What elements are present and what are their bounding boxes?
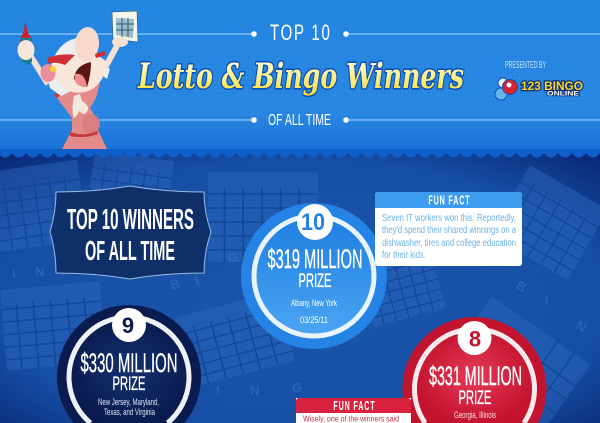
winner 8: PRIZE — [458, 388, 492, 409]
presented by: PRESENTED BY — [505, 59, 546, 71]
mascot: lottery winner — [18, 11, 138, 149]
background: bingo cards: I — [216, 383, 220, 398]
winner 8: 8 — [469, 326, 481, 352]
logo: 123 bingo online: ONLINE — [547, 92, 579, 98]
background: bingo cards: B — [514, 278, 529, 295]
background: bingo cards: N — [35, 264, 44, 279]
winner 9: New Jersey, Maryland, — [98, 397, 159, 407]
fun fact: winner 10: FUN FACT — [428, 195, 470, 208]
fun fact: winner 10: Seven IT workers won this. Reportedly, — [382, 212, 516, 224]
fun fact: winner 8 — [296, 398, 411, 423]
background: bingo cards — [0, 150, 600, 423]
logo: 123 bingo online: 123 BINGO — [521, 79, 583, 93]
winner 9 — [57, 305, 201, 423]
banner: top 10 winners — [50, 186, 211, 279]
winner 8 — [403, 317, 546, 423]
heading: of all time: OF ALL TIME — [268, 112, 331, 129]
winner 8: Georgia, Illinois — [454, 410, 496, 420]
winner 9: Texas, and Virginia — [104, 407, 155, 417]
fun fact: winner 8: FUN FACT — [333, 400, 375, 414]
fun fact: winner 10: they'd spend their shared winnings on a — [382, 224, 516, 236]
fun fact: winner 10 — [375, 192, 522, 266]
banner: top 10 winners: TOP 10 WINNERS — [67, 204, 194, 236]
header rules — [0, 31, 600, 123]
winner 10: 10 — [301, 209, 325, 236]
background: bingo cards: I — [193, 273, 201, 289]
fun fact: winner 10: dishwasher, tires and college education — [382, 237, 516, 249]
background: bingo cards: G — [228, 250, 238, 265]
logo: 123 bingo online — [495, 78, 583, 100]
background: bingo cards: B — [168, 276, 182, 293]
background: bingo cards: G — [292, 380, 302, 395]
winner 10: Albany, New York — [291, 298, 337, 308]
winner 10: 03/25/11 — [300, 315, 328, 325]
title: Lotto & Bingo Winners — [137, 56, 464, 97]
header band — [0, 0, 600, 158]
winner 10 — [241, 203, 387, 349]
background: bingo cards: N — [250, 383, 259, 398]
winner 9: $330 MILLION — [80, 348, 178, 378]
fun fact: winner 10: for their kids. — [382, 249, 426, 261]
winner 8: $331 MILLION — [429, 361, 522, 391]
heading: top 10: TOP 10 — [270, 20, 330, 45]
background: bingo cards: I — [545, 293, 549, 308]
winner 10: PRIZE — [298, 271, 332, 292]
winner 10: $319 MILLION — [268, 244, 362, 274]
winner 9: 9 — [122, 313, 134, 338]
banner: top 10 winners: OF ALL TIME — [85, 235, 175, 266]
winner 9: PRIZE — [112, 374, 146, 395]
background: bingo cards: N — [574, 318, 589, 335]
background: bingo cards: I — [12, 266, 16, 281]
